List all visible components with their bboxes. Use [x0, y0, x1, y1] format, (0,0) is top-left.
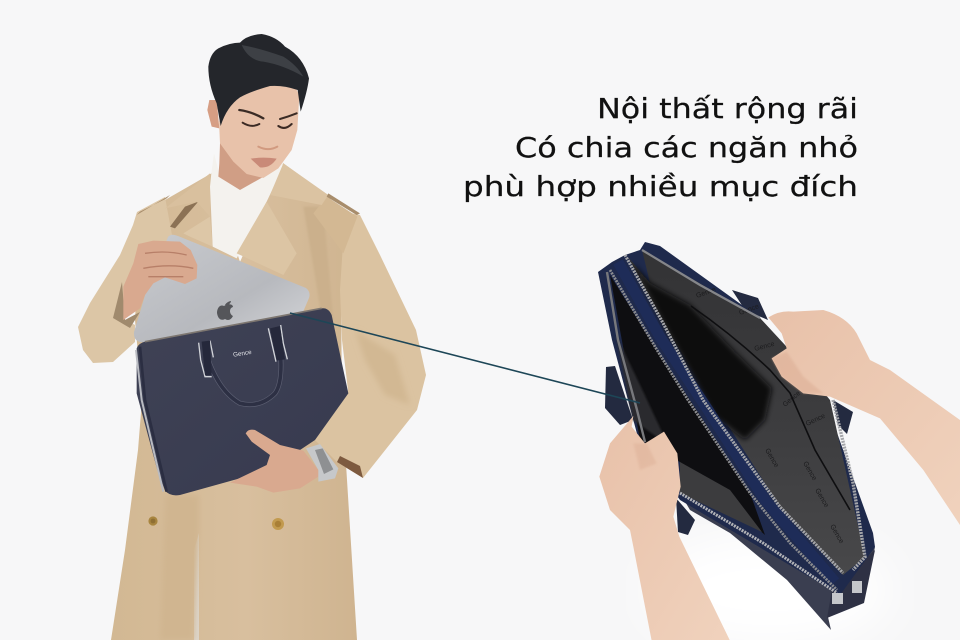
main shell [598, 242, 875, 595]
lining logos: Gence [763, 448, 780, 469]
lips [251, 158, 277, 167]
handle hardware [199, 325, 287, 377]
heading line 2: Có chia các ngăn nhỏ [515, 131, 858, 164]
left sleeve [78, 197, 172, 363]
laptop [134, 235, 310, 342]
right compartment lining [628, 250, 865, 575]
turtleneck [210, 153, 284, 258]
coat buttons [148, 516, 284, 530]
bag handle [205, 333, 281, 405]
side handles [605, 290, 853, 535]
zippers [607, 250, 865, 593]
lining logos: Gence [828, 524, 845, 545]
icon: apple logo [217, 301, 233, 320]
coat collars and lapels [137, 163, 360, 330]
coat front slit [194, 533, 199, 640]
left compartment lining [616, 335, 668, 445]
face [219, 85, 299, 178]
bag side zipper [136, 350, 163, 492]
man with trench coat [78, 34, 426, 640]
icon: connector line [290, 313, 640, 403]
lining logos: Gence [805, 413, 827, 428]
coat torso [111, 163, 357, 640]
lower outer shell [680, 493, 875, 630]
lining logos: Gence [695, 286, 717, 300]
open navy briefcase [598, 242, 875, 630]
right hand finger shading [772, 352, 823, 393]
bag logo: Gence [233, 349, 253, 359]
zipper pulls [832, 581, 862, 604]
lining logos: Gence [813, 488, 830, 509]
wristwatch [306, 444, 338, 482]
right hand and forearm [768, 310, 960, 525]
ear [207, 100, 219, 128]
left hand finger shading [633, 443, 657, 470]
lining logos: Gence [782, 390, 802, 409]
lining logos: Gence [754, 341, 776, 353]
holding hand [230, 430, 318, 493]
right sleeve [315, 212, 426, 478]
hair [208, 34, 309, 126]
bag body [137, 308, 348, 495]
divider navy band [618, 262, 835, 582]
hand on laptop [123, 241, 197, 320]
lining logos: Gence [801, 460, 818, 482]
navy briefcase held by man [136, 308, 348, 495]
head [207, 34, 309, 190]
heading line 1: Nội thất rộng rãi [597, 92, 858, 125]
eyebrows and eyes [239, 110, 297, 149]
black shadow in right compartment [632, 262, 772, 440]
lining logos: Gence [738, 303, 760, 317]
left compartment interior [610, 275, 765, 535]
lower pocket lining [680, 462, 762, 532]
neck [218, 133, 283, 190]
left hand and forearm [599, 416, 730, 640]
coat fold shadows [160, 495, 199, 640]
heading [463, 92, 858, 203]
lining logos [695, 286, 845, 545]
hands holding bag open [599, 310, 960, 640]
right sleeve fold shading [355, 330, 410, 405]
pocket seam [691, 306, 850, 510]
left cuff lining [113, 282, 140, 328]
heading line 3: phù hợp nhiều mục đích [463, 170, 858, 203]
right cuff lining [337, 456, 363, 478]
